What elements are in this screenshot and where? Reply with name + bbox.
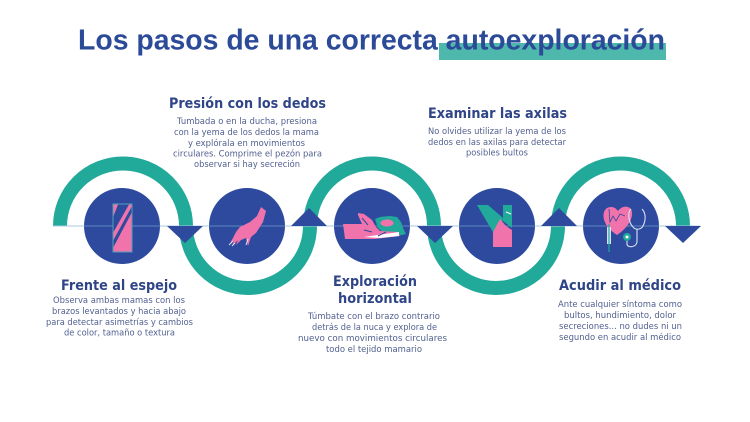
step: Frente al espejo: Observa ambas mamas con los bbox=[53, 296, 185, 306]
icon: lying figure bbox=[334, 188, 410, 264]
arrow 1 bbox=[167, 226, 203, 243]
arrow 4 bbox=[541, 208, 577, 226]
step: Exploración horizontal: Exploración bbox=[333, 274, 417, 290]
step: Frente al espejo: brazos levantados y hacia abajo bbox=[52, 307, 186, 317]
step: Acudir al médico: bultos, hundimiento, dolor bbox=[564, 311, 676, 321]
step: Examinar las axilas: No olvides utilizar la yema de los bbox=[428, 127, 566, 137]
step: Exploración horizontal bbox=[298, 274, 447, 355]
arrow 2 bbox=[291, 208, 327, 226]
step: Exploración horizontal: nuevo con movimientos circulares bbox=[298, 334, 447, 344]
step: Frente al espejo: para detectar asimetrías y cambios bbox=[46, 318, 193, 328]
step: Acudir al médico: secreciones... no dudes ni un bbox=[559, 322, 682, 332]
step: Presión con los dedos bbox=[169, 96, 326, 170]
step: Presión con los dedos: circulares. Comprime el pezón para bbox=[173, 148, 322, 160]
step: Examinar las axilas: Examinar las axilas bbox=[428, 106, 567, 122]
step: Examinar las axilas: posibles bultos bbox=[466, 148, 528, 158]
step: Acudir al médico: segundo en acudir al médico bbox=[559, 332, 681, 343]
step: Frente al espejo bbox=[46, 278, 193, 338]
icon: mirror bbox=[84, 188, 160, 264]
step: Examinar las axilas bbox=[428, 106, 567, 158]
step: Examinar las axilas: dedos en las axilas para detectar bbox=[428, 138, 566, 148]
step: Presión con los dedos: y explórala en movimientos bbox=[188, 138, 305, 149]
step: Presión con los dedos: Tumbada o en la ducha, presiona bbox=[176, 117, 317, 127]
title: Los pasos de una correcta autoexploración bbox=[78, 24, 665, 56]
step: Exploración horizontal: horizontal bbox=[338, 291, 412, 307]
step: Exploración horizontal: detrás de la nuca y explora de bbox=[312, 323, 437, 333]
arrow 3 bbox=[417, 226, 453, 243]
step: Presión con los dedos: observar si hay secreción bbox=[194, 159, 300, 170]
step: Frente al espejo: Frente al espejo bbox=[61, 278, 177, 294]
arrow 5 bbox=[665, 226, 701, 243]
step: Acudir al médico: Acudir al médico bbox=[559, 278, 681, 294]
step: Acudir al médico bbox=[558, 278, 682, 343]
step: Exploración horizontal: Túmbate con el brazo contrario bbox=[307, 312, 440, 322]
flow path: teal wave bbox=[60, 164, 683, 288]
step: Frente al espejo: de color, tamaño o textura bbox=[64, 328, 175, 338]
icon: hand bbox=[209, 188, 285, 264]
icon: heart and stethoscope bbox=[583, 188, 659, 264]
step: Exploración horizontal: todo el tejido mamario bbox=[326, 345, 422, 355]
step: Presión con los dedos: Presión con los dedos bbox=[169, 96, 326, 112]
step: Presión con los dedos: con la yema de los dedos la mama bbox=[174, 128, 319, 138]
title highlight bbox=[439, 43, 666, 60]
icon: armpit bbox=[459, 188, 535, 264]
step: Acudir al médico: Ante cualquier síntoma como bbox=[558, 300, 682, 310]
